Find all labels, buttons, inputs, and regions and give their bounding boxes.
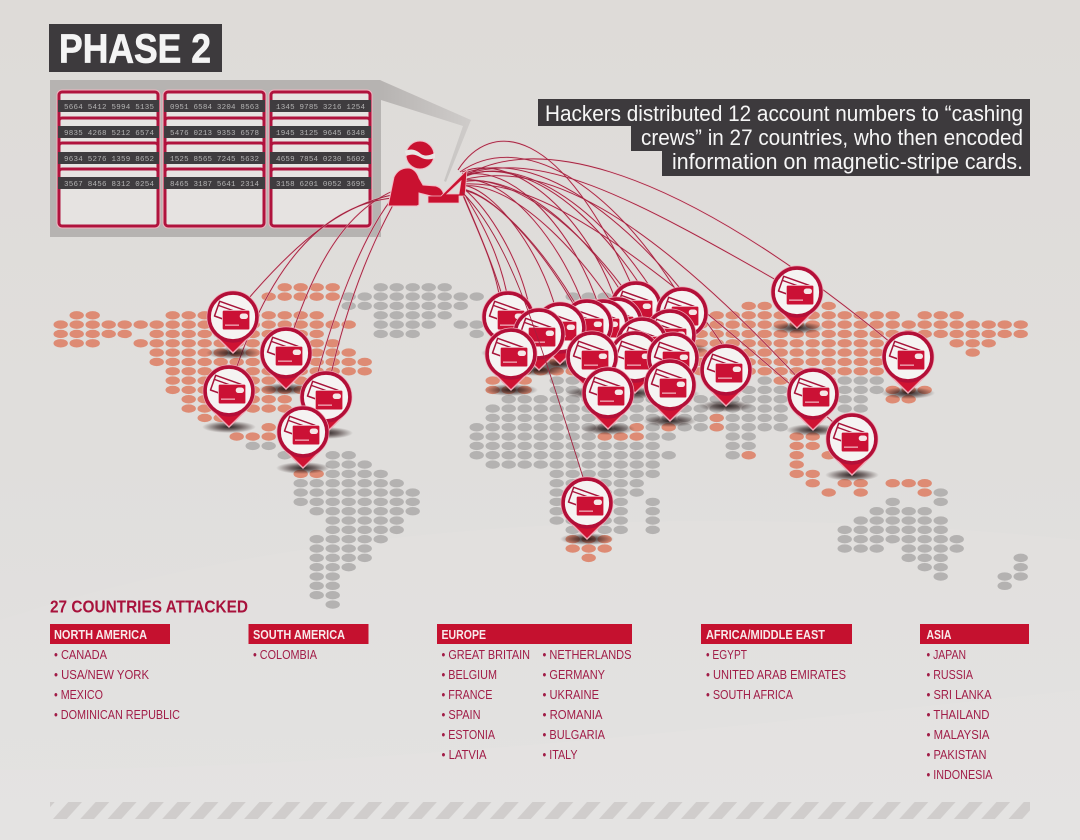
icon: hacker at laptop: [388, 141, 467, 206]
pin: Romania: [615, 317, 669, 385]
list: Europe: • UKRAINE: [542, 687, 599, 702]
pin: Japan: [881, 331, 935, 399]
account numbers: 3567 8456 8312 0254: [64, 181, 154, 189]
list: Asia: • THAILAND: [926, 707, 990, 722]
callout text: Hackers distributed 12 account numbers to “cashing: [545, 101, 1023, 126]
callout text: information on magnetic-stripe cards.: [672, 149, 1023, 174]
map dots: non-targeted countries (gray): [253, 287, 1022, 605]
account numbers: 9835 4268 5212 6574: [64, 130, 154, 138]
heading: 27 countries attacked: 27 COUNTRIES ATTACKED: [50, 596, 248, 616]
pin: Malaysia: [825, 413, 879, 481]
hacker body: [388, 168, 444, 206]
pin: Great Britain: [481, 291, 535, 359]
list: South America: • COLOMBIA: [253, 647, 317, 662]
pin: Germany: [655, 287, 709, 355]
list: North America: NORTH AMERICA: [54, 628, 147, 642]
list: Europe: • NETHERLANDS: [542, 647, 632, 662]
list: Europe: • ITALY: [542, 747, 578, 762]
arcs from hacker to countries: [229, 141, 908, 439]
pin: Colombia: [276, 406, 330, 474]
account numbers: 1345 9785 3216 1254: [276, 104, 365, 112]
list: Asia: [920, 624, 1029, 782]
list: Europe: • GREAT BRITAIN: [442, 647, 530, 662]
list: Europe: • ROMANIA: [542, 707, 603, 722]
list: North America: • USA/NEW YORK: [54, 667, 149, 682]
list: Africa / Middle East: • EGYPT: [706, 647, 747, 662]
list: Africa / Middle East: AFRICA/MIDDLE EAST: [706, 628, 825, 642]
list: Asia: ASIA: [926, 628, 952, 642]
pin: Dominican Republic: [299, 371, 353, 439]
list: Europe: • ESTONIA: [442, 727, 495, 742]
account numbers: 9634 5276 1359 8652: [64, 156, 154, 164]
card glow: [59, 92, 370, 226]
list: Africa / Middle East: • SOUTH AFRICA: [706, 687, 793, 702]
dotted world map: [61, 287, 1022, 605]
magnetic strips: [58, 100, 371, 189]
pin: Belgium: [533, 302, 587, 370]
pin: Russia: [770, 266, 824, 334]
list: Europe: EUROPE: [442, 628, 486, 642]
account numbers: 0951 6584 3204 8563: [170, 104, 259, 112]
account numbers: 4659 7854 0230 5602: [276, 156, 365, 164]
callout text: crews” in 27 countries, who then encoded: [641, 125, 1023, 150]
card column 3: [271, 92, 370, 226]
projection panel with stolen account cards: [50, 80, 471, 237]
account numbers: 5664 5412 5994 5135: [64, 104, 154, 112]
account numbers: 8465 3187 5641 2314: [170, 181, 259, 189]
pin: Thailand: [786, 368, 840, 436]
list: North America: [50, 624, 180, 722]
list: North America: • CANADA: [54, 647, 107, 662]
pin: Spain: [484, 328, 538, 396]
pin: Estonia: [576, 299, 630, 367]
list: Asia: • PAKISTAN: [926, 747, 986, 762]
list: Europe: • FRANCE: [442, 687, 493, 702]
account numbers: 5476 0213 9353 6578: [170, 130, 259, 138]
pin: France: [512, 308, 566, 376]
pin: Italy: [608, 331, 662, 399]
list: Europe: • BELGIUM: [442, 667, 497, 682]
list: Asia: • INDONESIA: [926, 767, 993, 782]
pins: Americas: [202, 291, 353, 474]
account numbers: 1945 3125 9645 6348: [276, 130, 365, 138]
list: South America: [248, 624, 368, 662]
pin: Central Europe: [565, 331, 619, 399]
pin: Mexico: [202, 365, 256, 433]
list: Europe: • LATVIA: [442, 747, 487, 762]
pin: USA / New York: [259, 327, 313, 395]
account numbers: [64, 104, 365, 189]
map dots: targeted countries (red): [61, 287, 1022, 558]
pin: Pakistan: [699, 344, 753, 412]
arc to South Africa: [462, 192, 587, 490]
projector beam: [50, 80, 471, 237]
pin: Ukraine: [643, 309, 697, 377]
pin: Turkey region: [646, 332, 700, 400]
pin: United Arab Emirates: [643, 359, 697, 427]
pin: Latvia: [560, 299, 614, 367]
map pins: back row: [481, 281, 753, 435]
pins: Russia and Asia: [770, 266, 935, 481]
list: Europe: [437, 624, 632, 762]
list: Europe: • SPAIN: [442, 707, 480, 722]
list: South America: SOUTH AMERICA: [253, 628, 345, 642]
pin: Netherlands: [590, 297, 644, 365]
list: Asia: • JAPAN: [926, 647, 966, 662]
list: Europe: • BULGARIA: [542, 727, 605, 742]
account numbers: 1525 8565 7245 5632: [170, 156, 259, 164]
list: Europe: • GERMANY: [542, 667, 605, 682]
list: Asia: • RUSSIA: [926, 667, 973, 682]
callout text: [538, 99, 1030, 176]
list: North America: • DOMINICAN REPUBLIC: [54, 707, 180, 722]
list: North America: • MEXICO: [54, 687, 103, 702]
account numbers: 3158 6201 0052 3695: [276, 181, 365, 189]
list: Africa / Middle East: • UNITED ARAB EMIRATES: [706, 667, 846, 682]
title: phase 2: PHASE 2: [59, 26, 211, 72]
card column 2: [165, 92, 264, 226]
pin: Canada: [206, 291, 260, 359]
pin: Bulgaria: [609, 281, 663, 349]
list: Asia: • MALAYSIA: [926, 727, 990, 742]
laptop: [428, 170, 467, 203]
list: Asia: • SRI LANKA: [926, 687, 992, 702]
footer hazard stripe: [50, 802, 1030, 819]
card column 1: [59, 92, 158, 226]
pin: South Africa: [560, 477, 614, 545]
list: Africa / Middle East: [701, 624, 852, 702]
hacker head with mask: [405, 141, 435, 169]
pin: Egypt: [581, 367, 635, 435]
